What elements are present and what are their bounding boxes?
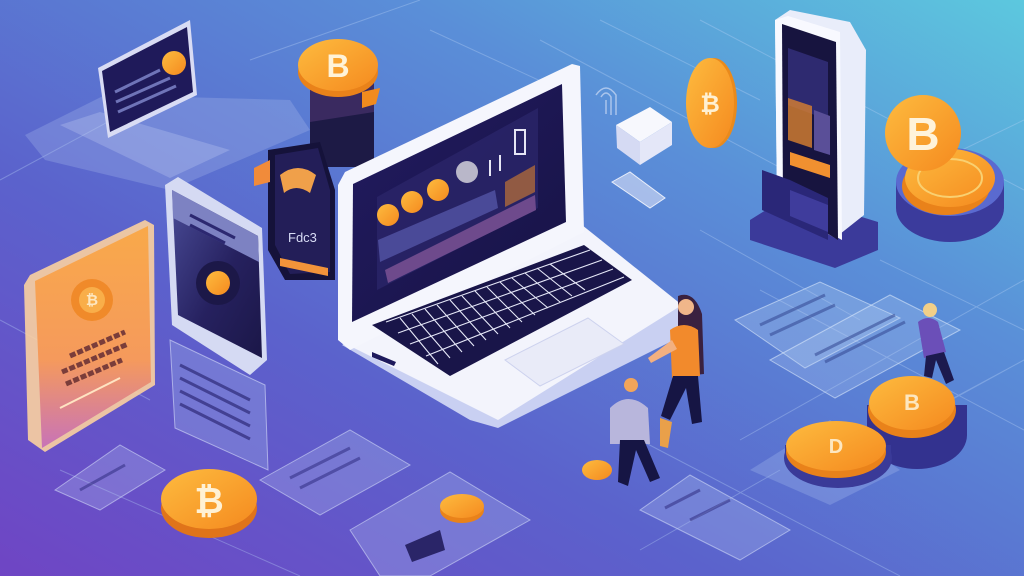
icon: woman in orange <box>648 295 704 448</box>
icon: person right <box>918 303 954 384</box>
icon: white cube <box>616 107 672 165</box>
laptop screen <box>338 64 584 350</box>
screen bars <box>378 130 536 283</box>
icon: fingerprint <box>596 88 616 115</box>
icon: coin on glass tray <box>405 494 484 562</box>
panel: orange card <box>24 220 155 452</box>
icon: bitcoin coin stack top right: B <box>906 108 940 160</box>
icon: coin stack lower right: B <box>904 390 920 415</box>
icon: dark phone behind laptop: Fdc3 <box>288 230 317 245</box>
icon: floating coin <box>686 58 737 148</box>
icon: bitcoin coin bottom left: ₿ <box>194 480 224 521</box>
icon: bitcoin coin bottom left <box>161 469 257 538</box>
icon: small ground coin <box>582 460 612 480</box>
panel: glass documents right <box>735 282 960 398</box>
panel: glass cards bottom center <box>55 430 790 576</box>
icon: coin stack lower right <box>867 376 967 469</box>
panel: tall phone on dock <box>750 10 878 268</box>
icon: bitcoin coin stack top right <box>885 95 1004 242</box>
keyboard <box>372 245 632 376</box>
icon: tablet <box>98 20 197 138</box>
icon: man with grey jacket <box>610 378 660 486</box>
icon: floating coin: ₿ <box>700 91 720 118</box>
icon: top coin tower <box>298 39 380 167</box>
panel: laptop <box>338 64 682 428</box>
icon: coin stack lower center <box>750 420 900 505</box>
panel: orange card: ₿ <box>86 292 98 309</box>
text lines on glass cards <box>80 448 730 520</box>
screen coins <box>377 161 478 226</box>
laptop base <box>342 228 682 428</box>
panel: top left tablet platform <box>25 20 310 190</box>
trackpad <box>505 318 624 386</box>
icon: coin stack lower center: D <box>829 436 843 458</box>
panel: glass document stack <box>170 340 268 470</box>
icon: top coin tower: B <box>326 48 350 84</box>
panel: glass phone left <box>165 177 267 375</box>
icon: small device <box>612 172 665 208</box>
icon: dark phone behind laptop <box>254 142 335 280</box>
